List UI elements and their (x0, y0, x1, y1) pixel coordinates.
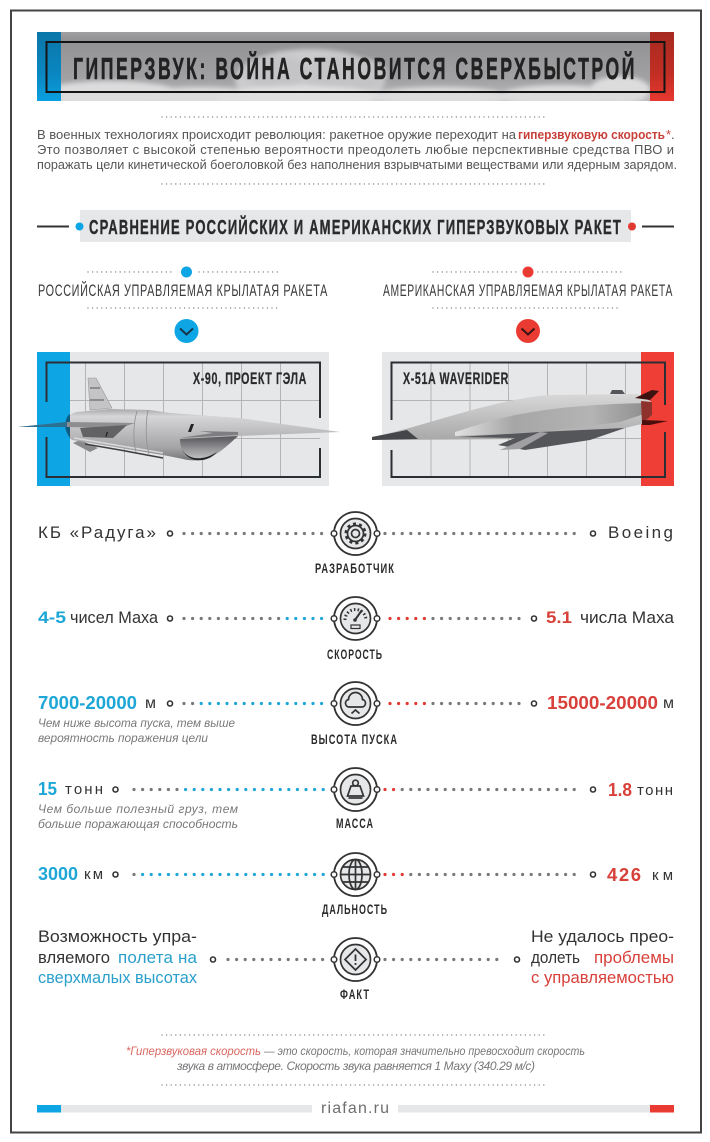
left text: полета на (118, 948, 198, 967)
intro paragraph: гиперзвуковую скорость (518, 127, 665, 142)
right value: числа Маха (580, 608, 675, 627)
american missile header (383, 266, 673, 343)
icon: blue chevron (174, 319, 198, 343)
note: больше поражающая способность (38, 817, 238, 831)
icon: globe (331, 853, 380, 896)
row: range (38, 853, 673, 917)
footnote (126, 1035, 585, 1085)
source: riafan.ru (321, 1100, 389, 1117)
note: Чем больше полезный груз, тем (38, 802, 238, 816)
label: РАЗРАБОТЧИК (315, 561, 395, 576)
row: mass (38, 768, 673, 831)
label: ДАЛЬНОСТЬ (322, 902, 388, 917)
right value: 426 (607, 864, 641, 885)
left text: Возможность упра- (38, 927, 197, 946)
icon: weight (331, 768, 380, 811)
icon: cloud (331, 682, 380, 725)
note (38, 716, 235, 745)
left text: сверхмалых высотах (38, 968, 197, 987)
intro paragraph: поражать цели кинетической боеголовкой без наполнения взрывчатыми веществами или ядерным зарядом. (37, 157, 677, 172)
right value: 5.1 (546, 608, 572, 627)
footnote: *Гиперзвуковая скорость (126, 1044, 261, 1058)
right value: 1.8 (608, 779, 632, 800)
left value: км (84, 866, 103, 883)
footnote: — это скорость, которая значительно превосходит скорость (263, 1044, 585, 1058)
right text (531, 927, 674, 987)
icon: gear (331, 512, 380, 555)
right value: 15000-20000 (547, 692, 658, 713)
left value: чисел Маха (70, 608, 159, 627)
label: СКОРОСТЬ (327, 647, 383, 662)
row: fact (38, 927, 674, 1002)
right value (608, 779, 673, 800)
left value: тонн (65, 781, 103, 798)
right value (607, 864, 673, 885)
left value (38, 778, 103, 799)
russian missile header: РОССИЙСКАЯ УПРАВЛЯЕМАЯ КРЫЛАТАЯ РАКЕТА (38, 281, 328, 300)
left value: 7000-20000 (38, 692, 137, 713)
left value: 4-5 (38, 608, 66, 627)
left value (38, 863, 103, 884)
left value: 15 (38, 778, 57, 799)
right text: Не удалось прео- (531, 927, 674, 946)
note: вероятность поражения цели (38, 731, 208, 745)
missile illustration: X-51A (372, 390, 668, 450)
section heading (37, 210, 674, 242)
footnote: звука в атмосфере. Скорость звука равняется 1 Маху (340.29 м/с) (176, 1059, 535, 1073)
right text: долеть (531, 948, 580, 967)
russian missile header (38, 266, 328, 343)
label: МАССА (336, 816, 374, 831)
row: developer (38, 512, 673, 576)
intro paragraph (37, 117, 677, 184)
row: speed (38, 597, 675, 662)
right value: тонн (637, 782, 673, 799)
right value: м (663, 695, 674, 712)
icon: red chevron (516, 319, 540, 343)
panel: russian missile: Х-90, ПРОЕКТ ГЭЛА (193, 369, 307, 388)
title banner (37, 32, 674, 101)
intro paragraph: . (671, 127, 675, 142)
missile illustration: Kh-90 (18, 378, 340, 460)
label: ВЫСОТА ПУСКА (311, 732, 398, 747)
icon: gauge (331, 597, 380, 640)
panel: american missile: X-51A WAVERIDER (403, 369, 509, 388)
right text: с управляемостью (531, 968, 674, 987)
panel: russian missile (18, 352, 340, 486)
panel: american missile (372, 352, 674, 486)
note: Чем ниже высота пуска, тем выше (38, 716, 235, 730)
right value: км (652, 867, 673, 884)
cloud background (61, 46, 650, 101)
left value: КБ «Радуга» (38, 523, 156, 542)
label: ФАКТ (340, 987, 370, 1002)
footer bar (37, 1100, 674, 1117)
left value: 3000 (38, 863, 78, 884)
note (38, 802, 238, 831)
intro paragraph: * (666, 127, 671, 142)
intro paragraph: Это позволяет с высокой степенью вероятности преодолеть любые перспективные средства ПВО и (37, 142, 674, 157)
intro paragraph: В военных технологиях происходит революция: ракетное оружие переходит на (37, 127, 517, 142)
right value: Boeing (608, 523, 673, 542)
icon: warning diamond (331, 938, 380, 981)
left text (38, 927, 198, 987)
row: launch altitude (38, 682, 674, 747)
left value: м (145, 695, 156, 712)
right text: проблемы (594, 948, 674, 967)
left text: вляемого (38, 948, 110, 967)
